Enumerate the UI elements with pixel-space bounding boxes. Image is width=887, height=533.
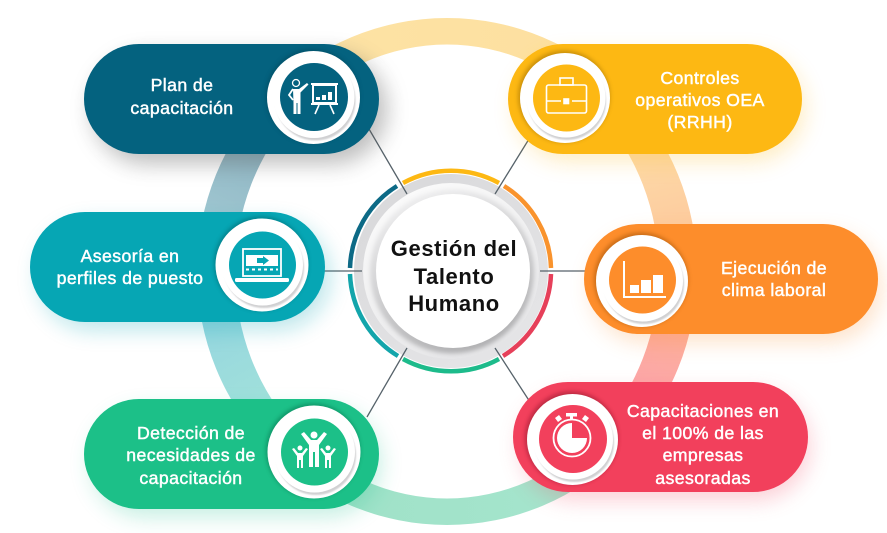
connector lines [322, 129, 586, 417]
icon: three people [292, 432, 336, 468]
label: capacitación [139, 468, 243, 488]
hub title [391, 236, 517, 316]
hub segmented colour ring [350, 171, 551, 371]
label: clima laboral [722, 280, 826, 300]
icon: presenter with board [289, 80, 338, 114]
label: Controles [660, 68, 740, 88]
label [627, 401, 779, 488]
icon: laptop [235, 249, 289, 282]
hub title: Humano [408, 291, 500, 316]
label [635, 68, 765, 132]
pill: Detección de necesidades [84, 399, 381, 517]
hub title: Gestión del [391, 236, 517, 261]
label: el 100% de las [642, 423, 764, 443]
label: operativos OEA [635, 90, 765, 110]
label [130, 75, 234, 118]
icon: briefcase [546, 78, 586, 113]
hub title: Talento [414, 264, 494, 289]
label: Asesoría en [81, 246, 179, 266]
label: Ejecución de [721, 258, 827, 278]
pill: Ejecución de clima laboral [584, 224, 881, 342]
pill: Plan de capacitación [84, 44, 387, 164]
label: perfiles de puesto [57, 268, 203, 288]
large background ring [202, 18, 692, 525]
label: Detección de [137, 423, 245, 443]
label [57, 246, 203, 288]
label [126, 423, 256, 488]
label: Capacitaciones en [627, 401, 779, 421]
label: necesidades de [126, 445, 256, 465]
label [721, 258, 827, 300]
pill: Asesoría en perfiles de puesto [30, 212, 330, 330]
pill: Controles operativos OEA [508, 44, 805, 162]
label: empresas [663, 445, 743, 465]
label: (RRHH) [667, 112, 733, 132]
label: asesoradas [655, 468, 751, 488]
pill: Capacitaciones [513, 382, 810, 500]
central hub [322, 129, 586, 417]
label: Plan de [151, 75, 213, 95]
icon: stopwatch [554, 413, 590, 456]
icon: bar chart [623, 261, 666, 298]
label: capacitación [130, 98, 234, 118]
